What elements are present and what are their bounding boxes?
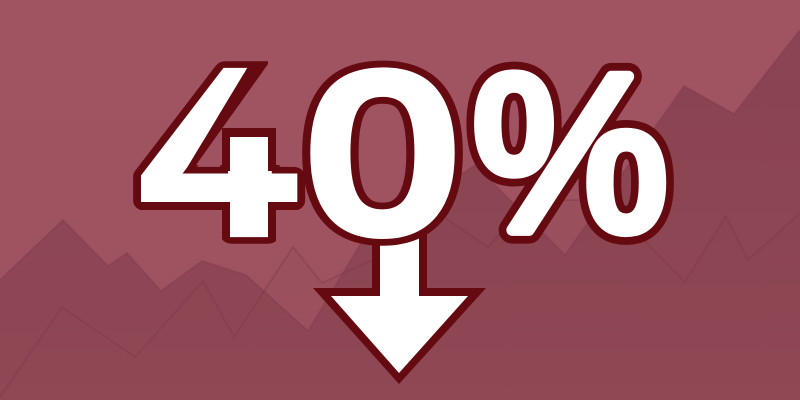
chart: front area line xyxy=(0,200,800,400)
headline: 40%: % xyxy=(472,29,668,278)
headline: 40%: % xyxy=(472,29,668,278)
headline: 40% xyxy=(133,60,674,246)
headline: 40%: 4 xyxy=(140,19,297,284)
headline: 40%: 0 xyxy=(308,29,457,278)
icon: down arrow xyxy=(313,225,486,384)
headline: 40%: 4 xyxy=(140,19,297,284)
headline: 40%: 0 xyxy=(308,29,457,278)
